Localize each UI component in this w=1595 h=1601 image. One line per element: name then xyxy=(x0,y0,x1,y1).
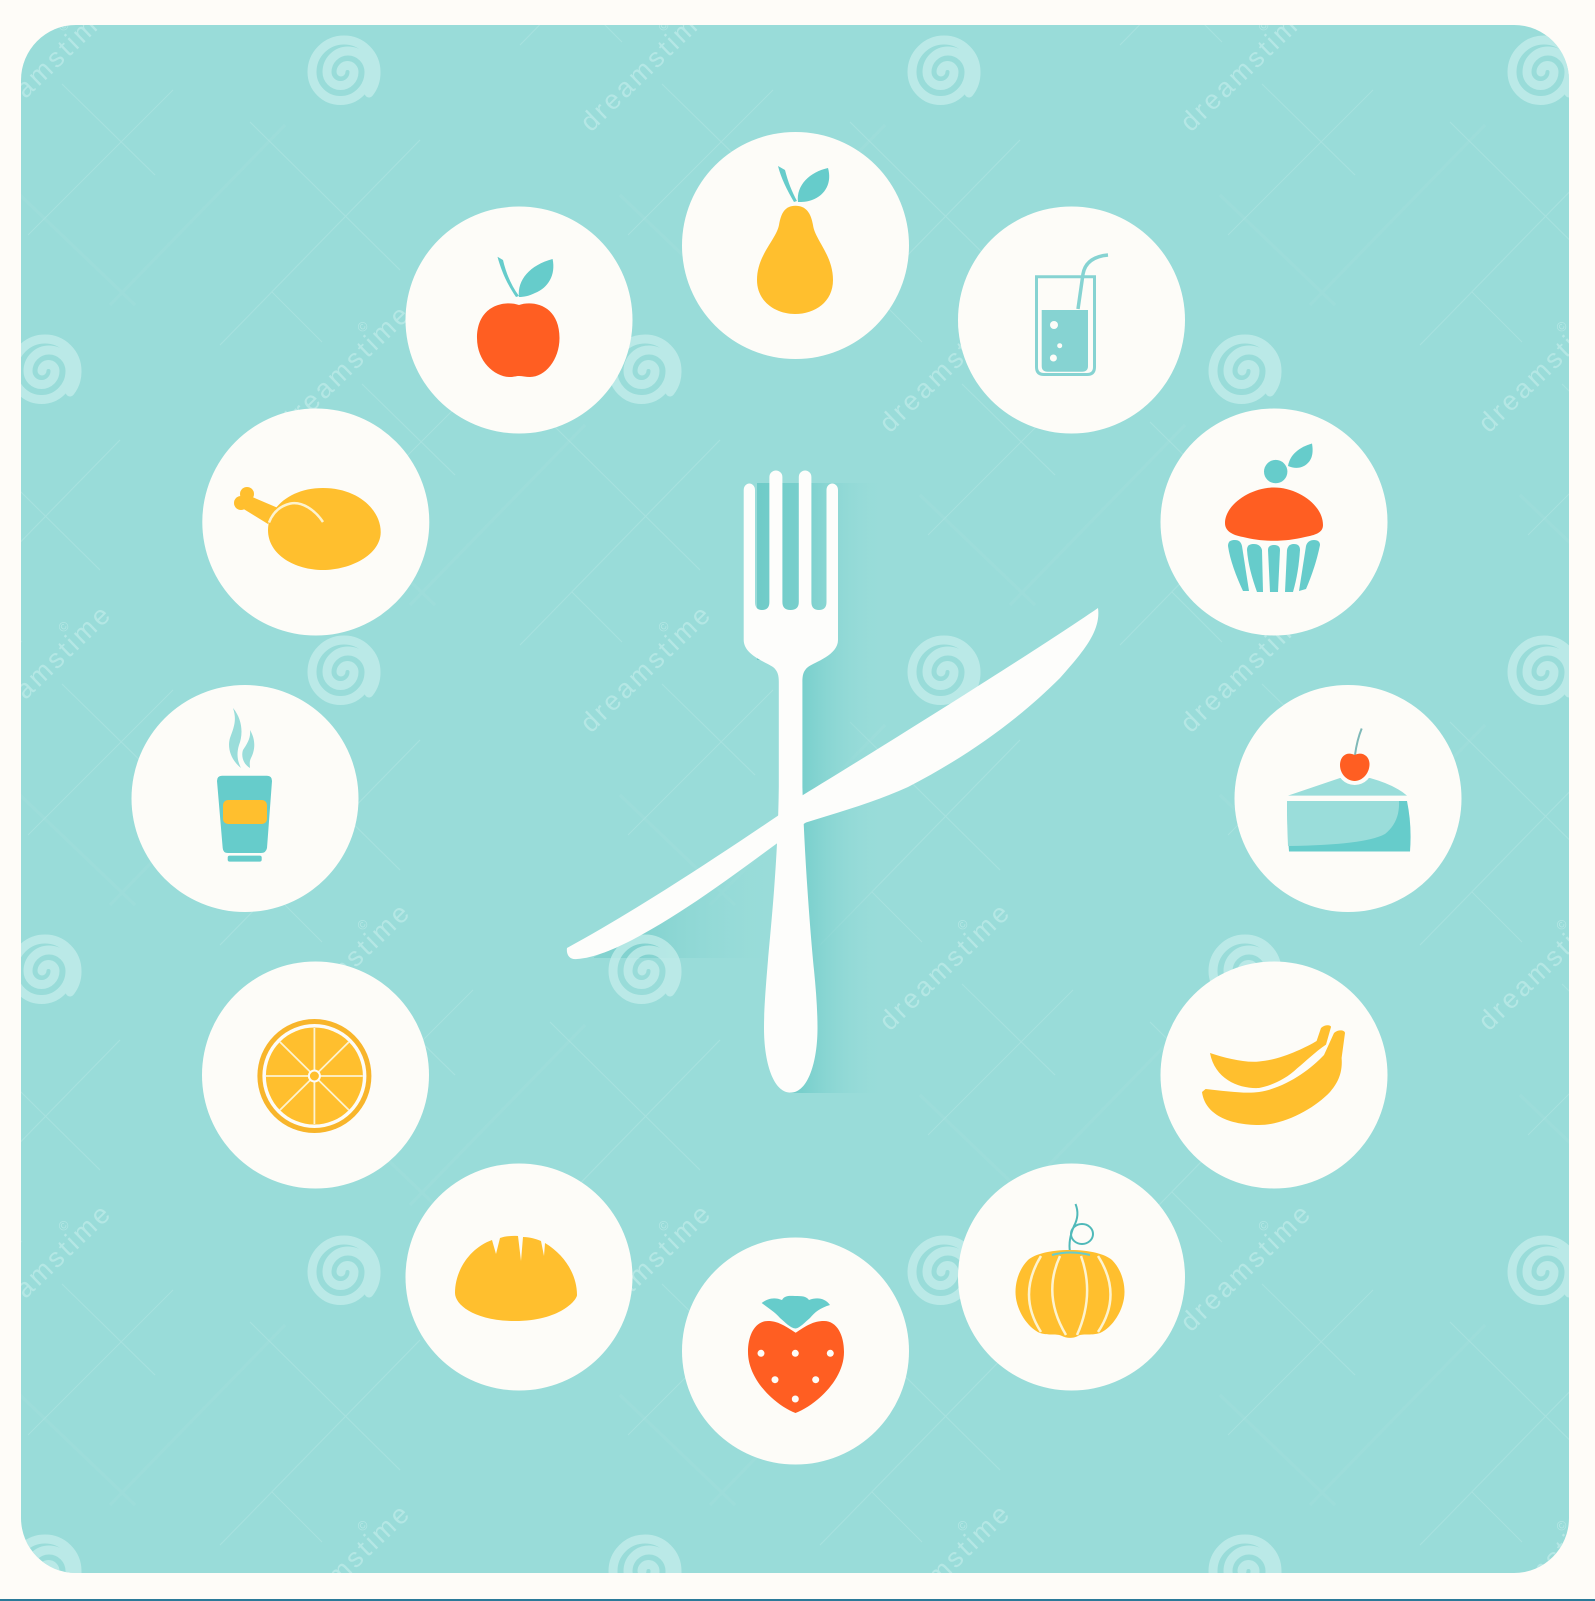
fork clock hand xyxy=(744,470,838,1093)
watermark text: © xyxy=(354,916,372,933)
icon: strawberry xyxy=(748,1296,844,1413)
circle 7: bread xyxy=(406,1164,632,1390)
watermark text: © xyxy=(655,17,673,34)
icon: bread loaf xyxy=(455,1236,577,1321)
watermark text: dreamstime xyxy=(1174,600,1316,738)
watermark text: dreamstime xyxy=(1174,1199,1316,1337)
circle 10: roast chicken xyxy=(202,408,429,636)
watermark text: © xyxy=(954,916,972,933)
circle 5: pumpkin xyxy=(958,1164,1185,1390)
watermark text: © xyxy=(655,1217,673,1234)
watermark text: dreamstime xyxy=(574,0,716,137)
watermark text: dreamstime xyxy=(273,898,415,1036)
icon: apple xyxy=(477,257,560,377)
icon: roast chicken xyxy=(234,487,381,570)
watermark text: © xyxy=(55,17,73,34)
watermark text: dreamstime xyxy=(873,300,1015,438)
circle 9: coffee cup xyxy=(132,685,358,912)
circle 8: orange slice xyxy=(202,962,429,1188)
icon: pumpkin xyxy=(1016,1204,1124,1338)
watermark text: dreamstime xyxy=(873,898,1015,1036)
watermark text: © xyxy=(354,318,372,335)
circle 3: cake slice xyxy=(1234,685,1462,912)
circle 6: strawberry xyxy=(682,1238,909,1464)
watermark text: © xyxy=(954,1517,972,1534)
fork long shadow xyxy=(757,483,858,1093)
watermark text: © xyxy=(1255,1217,1273,1234)
circle 2: cupcake xyxy=(1160,408,1388,636)
icon: pear xyxy=(757,166,833,314)
watermark text: dreamstime xyxy=(1174,0,1316,137)
watermark text: dreamstime xyxy=(574,1199,716,1337)
icon: bananas xyxy=(1202,1025,1345,1125)
watermark text: © xyxy=(1553,1517,1571,1534)
circle 1: juice glass xyxy=(958,206,1185,434)
watermark text: © xyxy=(655,618,673,635)
watermark text: © xyxy=(55,618,73,635)
circle 4: bananas xyxy=(1160,962,1388,1188)
watermark text: © xyxy=(55,1217,73,1234)
icon: cupcake xyxy=(1225,444,1323,592)
circle 12: pear xyxy=(682,132,909,359)
watermark text: dreamstime xyxy=(574,600,716,738)
icon: cake slice with cherry xyxy=(1287,728,1411,852)
watermark text: dreamstime xyxy=(273,300,415,438)
icon: orange slice xyxy=(257,1019,371,1133)
circle 11: apple xyxy=(406,206,632,434)
knife clock hand xyxy=(567,608,1098,959)
watermark text: © xyxy=(1553,318,1571,335)
knife long shadow xyxy=(594,902,698,958)
icon: coffee cup with steam xyxy=(217,708,272,862)
watermark text: © xyxy=(1553,916,1571,933)
watermark text: © xyxy=(954,318,972,335)
watermark text: © xyxy=(354,1517,372,1534)
bottom edge strip xyxy=(0,1599,1595,1601)
watermark text: © xyxy=(1255,618,1273,635)
watermark text: © xyxy=(1255,17,1273,34)
icon: glass with straw xyxy=(1036,255,1108,374)
